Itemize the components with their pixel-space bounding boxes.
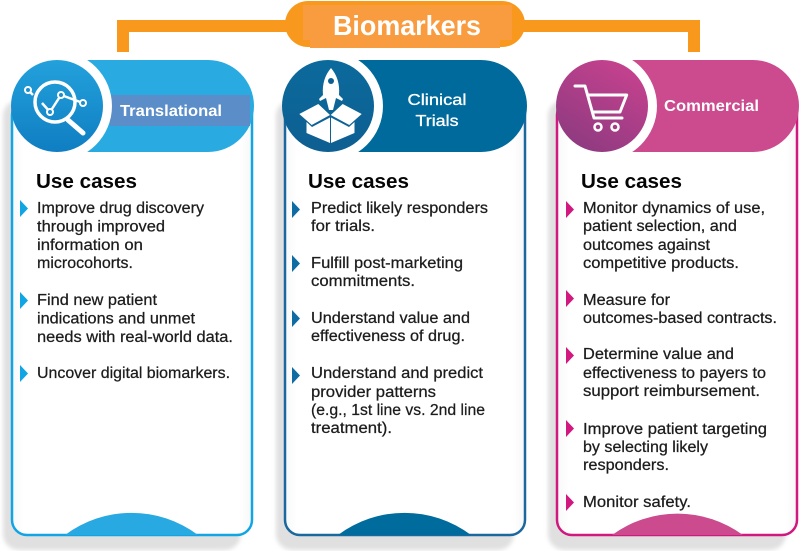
bullets [566, 201, 574, 511]
text block: use cases: commitments. [311, 273, 415, 290]
banner: Clinical Trials: Trials [416, 113, 459, 130]
text block: use cases: outcomes against [583, 237, 711, 254]
panel: Clinical Trials [276, 51, 527, 550]
bullets [292, 201, 300, 384]
title: Biomarkers: Biomarkers [333, 10, 481, 41]
heading: Use cases: Use cases [581, 170, 682, 193]
text block: use cases: provider patterns [311, 384, 436, 401]
text block: use cases: Understand value and [311, 310, 470, 327]
text block: use cases: effectiveness of drug. [311, 328, 465, 345]
banner: Translational [60, 60, 254, 152]
text block: use cases: Improve patient targeting [583, 421, 767, 438]
text block: use cases: microcohorts. [37, 255, 133, 272]
banner: Clinical Trials: Clinical [408, 92, 466, 109]
text block: use cases: patient selection, and [583, 218, 737, 235]
text block: use cases: Fulfill post-marketing [311, 255, 463, 272]
panel: Commercial [548, 51, 799, 550]
text block: use cases: responders. [583, 457, 669, 474]
text block: use cases: indications and unmet [37, 310, 196, 328]
text block: use cases: (e.g., 1st line vs. 2nd line [311, 402, 485, 419]
text block: use cases: support reimbursement. [583, 383, 760, 400]
text block: use cases: Uncover digital biomarkers. [37, 365, 230, 382]
text block: use cases: by selecting likely [583, 439, 708, 456]
dome: Commercial [612, 514, 743, 535]
icon: shopping cart [556, 60, 648, 152]
dome: Translational [65, 513, 198, 535]
text block: use cases: Understand and predict [311, 365, 484, 382]
text block: use cases: through improved [37, 218, 165, 236]
text block: use cases: Measure for [583, 292, 670, 309]
text block: use cases: Predict likely responders [311, 200, 488, 217]
text block: use cases [583, 200, 777, 511]
panel: Translational [3, 51, 254, 550]
text block: use cases [311, 200, 488, 437]
text block: use cases: outcomes-based contracts. [583, 310, 777, 327]
text block: use cases: Monitor safety. [583, 494, 691, 511]
text block: use cases: information on [37, 237, 143, 254]
text block: use cases: effectiveness to payers to [583, 365, 766, 382]
text block: use cases: Monitor dynamics of use, [583, 200, 765, 217]
dome: Clinical Trials [338, 513, 471, 535]
banner: Clinical Trials [331, 60, 527, 152]
banner: Commercial [605, 60, 799, 152]
connector bracket [117, 20, 700, 52]
heading: Use cases: Use cases [308, 170, 409, 193]
icon: rocket and box [282, 60, 374, 152]
label band: Translational: Translational [120, 103, 222, 120]
label band: Translational [110, 95, 250, 126]
banner: Commercial: Commercial [664, 98, 759, 115]
text block: use cases: Determine value and [583, 346, 734, 363]
text block: use cases [37, 200, 233, 382]
text block: use cases: needs with real-world data. [37, 329, 233, 346]
text block: use cases: treatment). [311, 420, 392, 437]
text block: use cases: for trials. [311, 218, 375, 235]
text block: use cases: Find new patient [37, 292, 158, 309]
text block: use cases: Improve drug discovery [37, 200, 204, 217]
text block: use cases: competitive products. [583, 255, 739, 272]
heading: Use cases: Use cases [36, 170, 137, 193]
icon: magnifier chart [11, 60, 103, 152]
bullets [20, 200, 28, 382]
title: Biomarkers [285, 1, 525, 48]
